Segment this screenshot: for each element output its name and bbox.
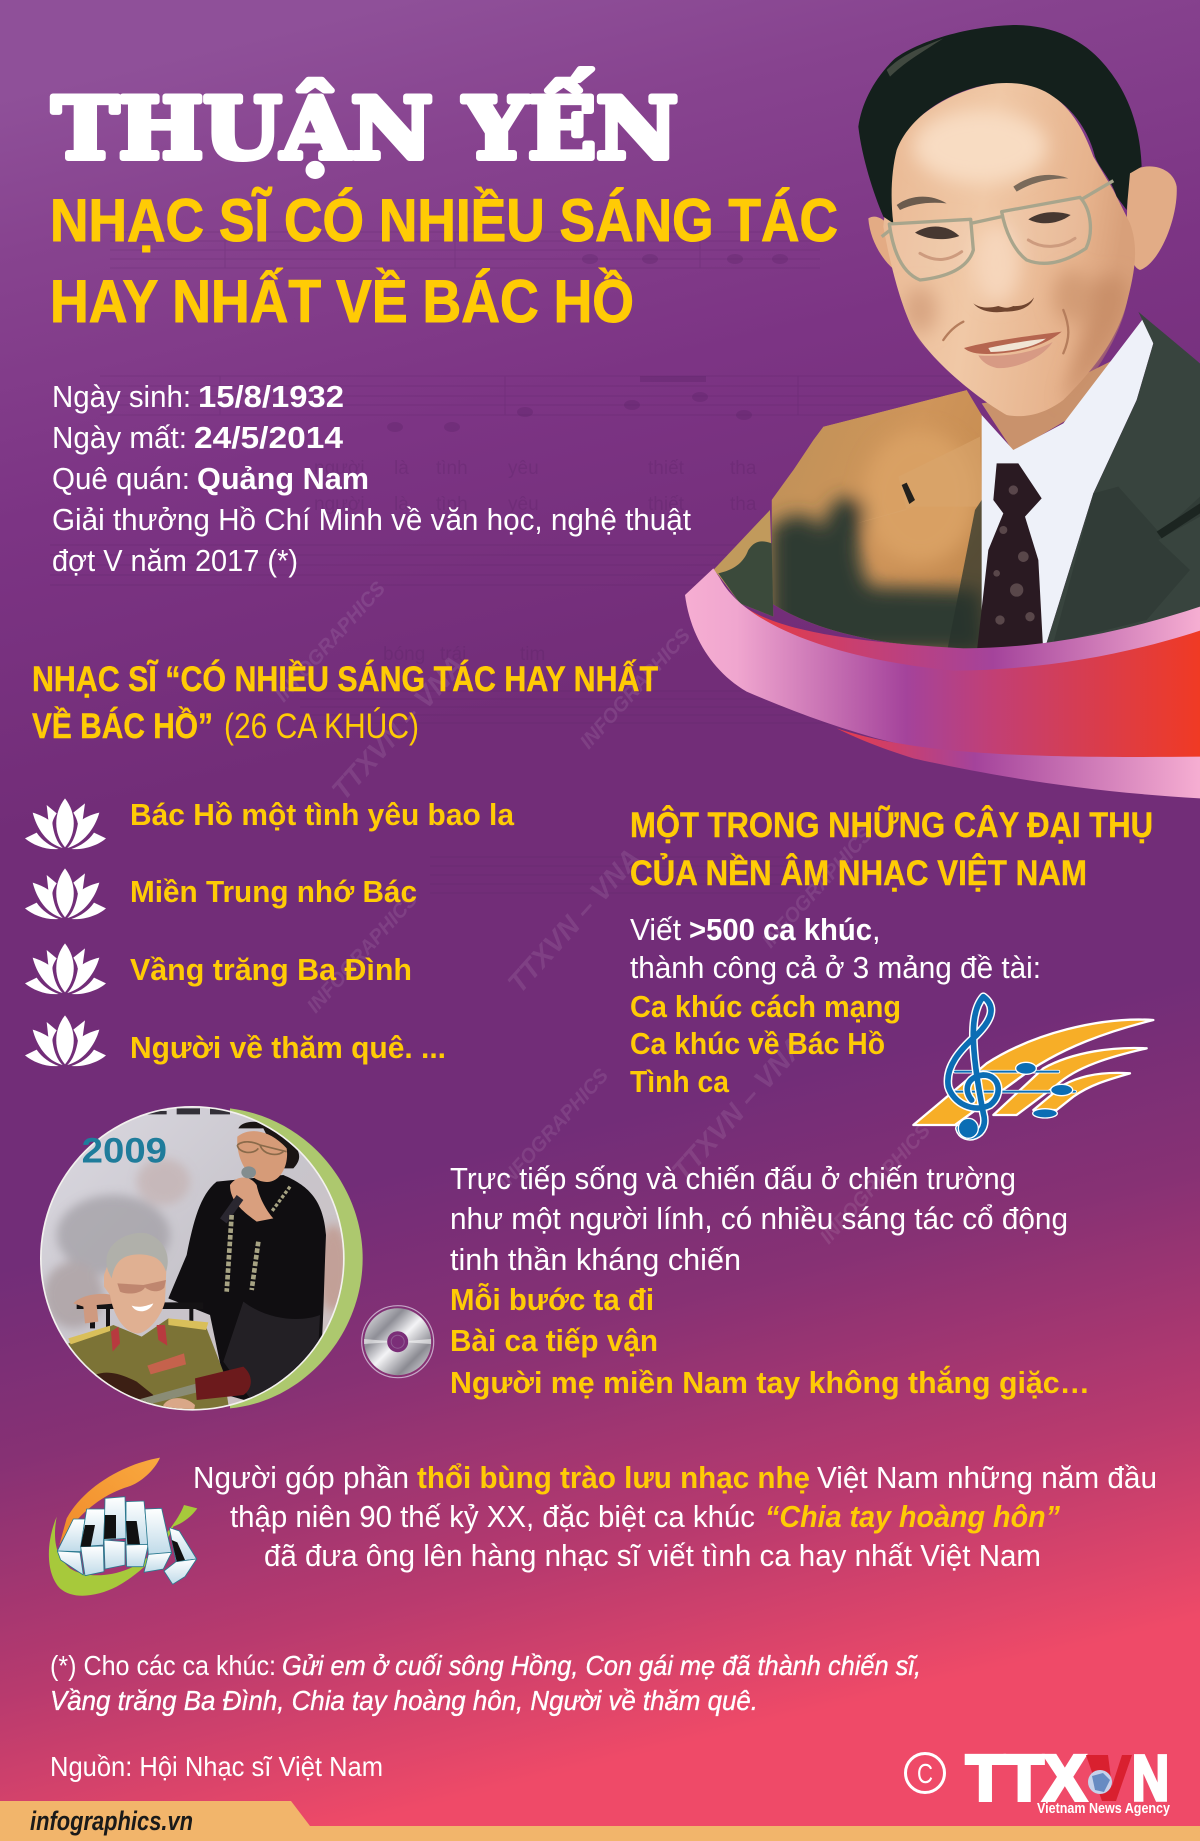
faint sheet music background: thiết	[648, 494, 685, 515]
song 1: Bác Hồ một tình yêu bao la	[130, 797, 515, 832]
photo border	[40, 1106, 345, 1411]
section: light music movement: thổi bùng trào lưu nhạc nhẹ	[417, 1460, 810, 1495]
section: great tree of Vietnamese music	[630, 805, 1153, 1099]
faint sheet music background	[50, 232, 1000, 893]
portrait of Thuận Yến	[770, 25, 1200, 653]
faint sheet music background: thiết	[648, 458, 685, 479]
section heading: 26 songs: (26 CA KHÚC)	[224, 707, 419, 746]
eyebrows and eyes	[897, 175, 1075, 353]
footnote: Vầng trăng Ba Đình, Chia tay hoàng hôn, Người về thăm quê.	[50, 1685, 758, 1716]
biography facts: Ngày sinh:	[52, 379, 191, 414]
section: soldier songs: như một người lính, có nhiều sáng tác cổ động	[450, 1201, 1068, 1236]
faint sheet music background: yêu	[508, 494, 539, 515]
watermarks: INFOGRAPHICS	[303, 888, 422, 1017]
icon: treble clef with notes	[913, 997, 1153, 1138]
main ribbon band	[685, 568, 1200, 758]
section: great tree of Vietnamese music: CỦA NỀN ÂM NHẠC VIỆT NAM	[630, 853, 1087, 893]
section heading: 26 songs: NHẠC SĨ “CÓ NHIỀU SÁNG TÁC HAY NHẤT	[32, 659, 658, 699]
title: THUẬN YẾN	[52, 69, 678, 178]
copyright logo TTXVN: N	[1132, 1742, 1169, 1814]
watermarks: INFOGRAPHICS	[576, 624, 695, 753]
icon: lotus 4	[25, 1015, 106, 1066]
photo background	[37, 1105, 350, 1412]
biography facts: 24/5/2014	[194, 420, 344, 455]
hair	[858, 25, 1142, 223]
faint sheet music background: tình	[436, 458, 468, 479]
faint sheet music background: là	[394, 458, 409, 479]
neck	[982, 360, 1113, 452]
tan jacket	[770, 390, 988, 653]
watermarks: INFOGRAPHICS	[494, 1064, 613, 1193]
section: great tree of Vietnamese music: Ca khúc về Bác Hồ	[630, 1026, 885, 1061]
watermarks: INFOGRAPHICS	[816, 1119, 935, 1248]
section: soldier songs	[450, 1161, 1090, 1400]
faint sheet music background: người	[314, 494, 365, 515]
icon: lotus 2	[25, 868, 106, 919]
right ear	[1127, 166, 1177, 270]
section: soldier songs: Bài ca tiếp vận	[450, 1323, 658, 1358]
faint sheet music background: tim	[520, 644, 545, 665]
copyright logo TTXVN: Vietnam News Agency	[1037, 1800, 1171, 1817]
section: great tree of Vietnamese music: Viết	[630, 912, 681, 947]
footer band	[0, 1801, 1200, 1841]
lower ribbon band	[837, 728, 1200, 798]
faint sheet music background: tình	[436, 494, 468, 515]
man	[77, 1302, 203, 1328]
biography facts: Giải thưởng Hồ Chí Minh về văn học, nghệ thuật	[52, 502, 691, 537]
section: great tree of Vietnamese music: ,	[872, 912, 881, 947]
source: Nguồn: Hội Nhạc sĩ Việt Nam	[50, 1751, 383, 1782]
faint sheet music background: bóng	[383, 644, 425, 665]
watermarks: TTXVN – VNA	[666, 1031, 810, 1187]
footnote: Gửi em ở cuối sông Hồng, Con gái mẹ đã thành chiến sĩ,	[282, 1650, 921, 1681]
section heading: 26 songs: VỀ BÁC HỒ”	[32, 706, 213, 746]
copyright logo TTXVN: TTX	[966, 1742, 1086, 1814]
watermarks: INFOGRAPHICS	[758, 823, 877, 952]
faint sheet music background: người	[314, 458, 365, 479]
subtitle: NHẠC SĨ CÓ NHIỀU SÁNG TÁC	[50, 187, 838, 254]
left ear	[868, 217, 900, 273]
biography facts: đợt V năm 2017 (*)	[52, 543, 298, 578]
copyright logo TTXVN: C	[917, 1758, 933, 1789]
song list	[25, 797, 515, 1066]
biography facts: 15/8/1932	[198, 379, 344, 414]
watermarks	[271, 577, 935, 1248]
section: soldier songs: tinh thần kháng chiến	[450, 1242, 741, 1277]
glasses	[882, 181, 1113, 280]
face shading	[903, 110, 1128, 403]
biography facts	[52, 379, 691, 578]
icon: lotus 1	[25, 798, 106, 849]
guitar	[96, 1372, 154, 1403]
dark jacket	[1043, 312, 1200, 653]
biography facts: Quê quán:	[52, 461, 190, 496]
biography facts: Ngày mất:	[52, 420, 187, 455]
shirt	[982, 318, 1153, 653]
watermarks: TTXVN – VNA	[326, 650, 470, 806]
song 2: Miền Trung nhớ Bác	[130, 874, 417, 909]
faint sheet music background: là	[394, 494, 409, 515]
section: light music movement: Người góp phần	[193, 1460, 409, 1495]
icon: lotus 3	[25, 943, 106, 994]
footnote	[50, 1650, 921, 1716]
section: great tree of Vietnamese music: Ca khúc cách mạng	[630, 989, 901, 1024]
upper ribbon band	[740, 603, 1200, 672]
photo year: 2009	[82, 1131, 167, 1170]
section: light music movement: “Chia tay hoàng hôn”	[765, 1499, 1060, 1534]
tie	[977, 463, 1043, 653]
footer band: infographics.vn	[30, 1806, 193, 1836]
faint sheet music background: tha	[730, 494, 757, 515]
subtitle	[50, 187, 838, 335]
biography facts: Quảng Nam	[197, 461, 369, 496]
section: light music movement	[193, 1460, 1157, 1573]
section: light music movement: đã đưa ông lên hàng nhạc sĩ viết tình ca hay nhất Việt Nam	[264, 1538, 1041, 1573]
photo: musician with singer	[37, 1105, 363, 1418]
subtitle: HAY NHẤT VỀ BÁC HỒ	[50, 268, 634, 335]
section: great tree of Vietnamese music: thành công cả ở 3 mảng đề tài:	[630, 950, 1041, 985]
faint sheet music background: trái	[440, 644, 466, 665]
section: soldier songs: Mỗi bước ta đi	[450, 1282, 654, 1317]
section: soldier songs: Trực tiếp sống và chiến đấu ở chiến trường	[450, 1161, 1016, 1196]
section: soldier songs: Người mẹ miền Nam tay không thắng giặc…	[450, 1364, 1090, 1400]
clothing	[770, 312, 1200, 653]
section: great tree of Vietnamese music: Tình ca	[630, 1064, 730, 1099]
copyright logo TTXVN	[906, 1742, 1171, 1817]
green crescent	[230, 1108, 363, 1408]
icon: CD	[362, 1306, 434, 1378]
icon: piano keys swoosh	[49, 1458, 197, 1596]
watermarks: INFOGRAPHICS	[271, 577, 390, 706]
woman	[168, 1175, 326, 1402]
section: light music movement: Việt Nam những năm đầu	[817, 1460, 1157, 1495]
face	[883, 82, 1135, 416]
section: light music movement: thập niên 90 thế kỷ XX, đặc biệt ca khúc	[230, 1499, 755, 1534]
song 3: Vầng trăng Ba Đình	[130, 952, 412, 987]
mouth	[964, 332, 1062, 368]
section: great tree of Vietnamese music: >500 ca khúc	[689, 912, 872, 947]
faint sheet music background: tha	[730, 458, 757, 479]
footnote: (*) Cho các ca khúc:	[50, 1650, 276, 1681]
left cut of shoulder	[713, 510, 773, 617]
ribbon	[685, 510, 1200, 798]
faint sheet music background: yêu	[508, 458, 539, 479]
watermarks: TTXVN – VNA	[502, 843, 646, 999]
section heading: 26 songs	[32, 659, 658, 746]
song 4: Người về thăm quê. ...	[130, 1030, 446, 1065]
